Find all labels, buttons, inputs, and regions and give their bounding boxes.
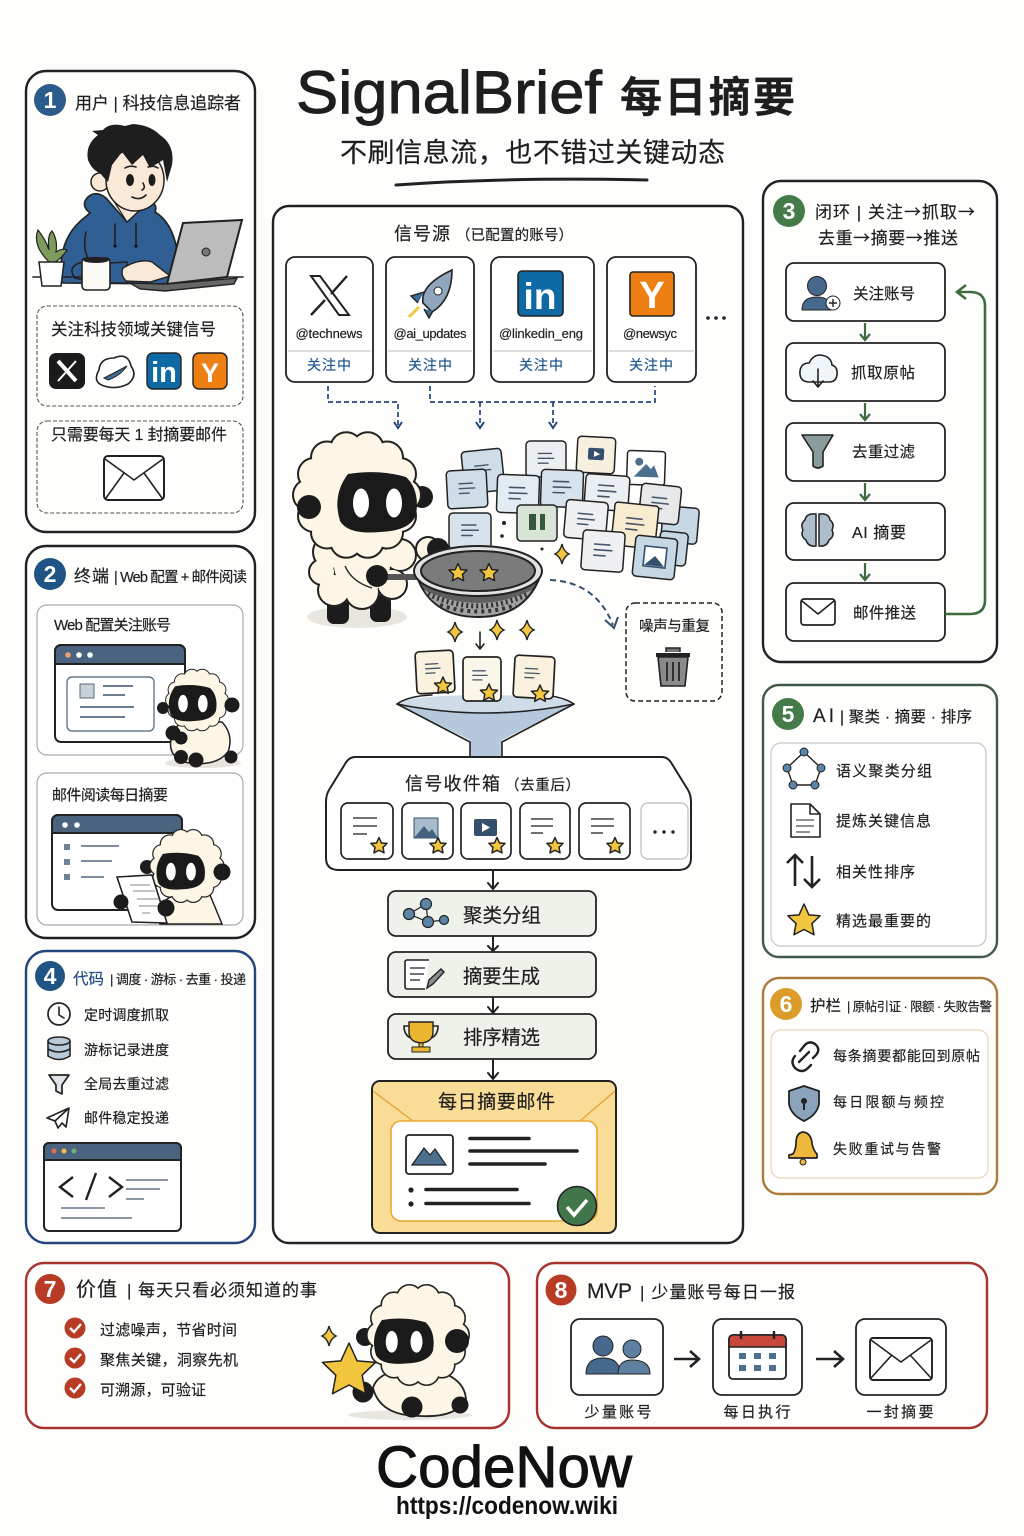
badge 2 <box>34 558 66 590</box>
badge 3: 3 <box>783 198 795 224</box>
step: dedupe: 去重过滤 <box>852 443 915 461</box>
row: extract <box>791 804 931 837</box>
step: follow <box>786 263 945 321</box>
icon: trash <box>656 648 690 686</box>
icon: X logo <box>311 276 349 315</box>
icon: envelope <box>104 456 164 500</box>
row: schedule <box>48 1003 169 1025</box>
value row 2: 聚焦关键，洞察先机 <box>100 1351 238 1369</box>
card: email reading: 邮件阅读每日摘要 <box>52 786 168 804</box>
card: technews <box>286 257 373 382</box>
icon: Y logo: Y <box>639 275 665 317</box>
dashed connectors <box>328 386 655 428</box>
badge 7 <box>35 1274 65 1304</box>
heading 2 <box>74 567 247 586</box>
email card: daily digest: 每日摘要邮件 <box>438 1091 555 1113</box>
footer brand: CodeNow <box>376 1435 633 1500</box>
panel: inbox: 信号收件箱 <box>405 774 500 794</box>
row: delivery: 邮件稳定投递 <box>84 1110 169 1126</box>
heading 3: 闭环 | 关注→抓取→ <box>815 198 975 223</box>
browser window <box>55 645 185 742</box>
panel 6: guardrails <box>763 978 997 1194</box>
heading 5: AI <box>813 706 834 727</box>
heading 7: | 每天只看必须知道的事 <box>127 1281 317 1300</box>
title: 每日摘要 <box>620 74 795 121</box>
panel: inbox <box>326 757 691 870</box>
row: shield: 每日限额与频控 <box>833 1094 944 1110</box>
heading 1: 用户 | 科技信息追踪者 <box>75 94 241 113</box>
more sources <box>706 316 726 320</box>
illustration: user at laptop <box>33 124 243 291</box>
icon: add user <box>802 276 840 310</box>
panel 7: value <box>26 1263 509 1428</box>
step: fetch <box>786 343 945 401</box>
tile: few accounts <box>571 1319 663 1421</box>
panel: inbox: （去重后） <box>505 777 580 794</box>
icon: cloud rocket <box>96 356 134 388</box>
email card: daily digest <box>372 1081 616 1233</box>
row: links <box>792 1042 980 1071</box>
heading 2: 终端 <box>74 567 109 586</box>
badge 1 <box>34 84 66 116</box>
card: ai_updates: 关注中 <box>408 357 452 373</box>
step: follow: 关注账号 <box>853 285 915 303</box>
icon: linkedin logo: in <box>524 276 556 317</box>
heading: sources <box>394 224 573 244</box>
card: web config <box>37 605 243 768</box>
card: ai_updates: @ai_updates <box>394 326 467 341</box>
card: newsyc: 关注中 <box>629 357 673 373</box>
badge 5 <box>772 698 804 730</box>
box: follow signals: 关注科技领域关键信号 <box>51 320 216 339</box>
step: summary generation <box>388 952 596 997</box>
box: follow signals <box>37 306 243 406</box>
panel 4: code <box>26 951 255 1243</box>
step: summarize: AI 摘要 <box>852 524 906 542</box>
icon: trophy <box>404 1022 438 1052</box>
heading 8 <box>587 1280 795 1303</box>
panel 3: closed loop <box>763 181 997 662</box>
illustration: incoming post cards <box>446 436 700 580</box>
heading 2: | Web 配置 + 邮件阅读 <box>114 569 247 586</box>
row: schedule: 定时调度抓取 <box>84 1007 169 1023</box>
panel 5: AI <box>763 685 997 957</box>
box: noise and duplicates <box>626 603 722 701</box>
badge 8 <box>546 1274 576 1306</box>
value row 1: 过滤噪声，节省时间 <box>100 1321 237 1339</box>
badge 7: 7 <box>44 1276 56 1302</box>
box: noise and duplicates: 噪声与重复 <box>639 617 710 635</box>
heading 4: | 调度 · 游标 · 去重 · 投递 <box>110 972 246 987</box>
heading 4: 代码 <box>73 970 104 988</box>
step: clustering <box>388 891 596 936</box>
step: fetch: 抓取原帖 <box>851 364 915 382</box>
icon: Y: Y <box>201 358 219 388</box>
heading 3 <box>815 198 975 249</box>
card: newsyc: @newsyc <box>623 326 678 341</box>
heading 4 <box>73 970 246 988</box>
heading 8: MVP <box>587 1280 632 1303</box>
icon: Y <box>193 353 227 389</box>
loop arrow <box>945 285 985 614</box>
heading: sources: （已配置的账号） <box>456 227 573 244</box>
row: ranking: 相关性排序 <box>836 864 915 881</box>
card: technews: 关注中 <box>307 357 351 373</box>
step: push email <box>786 583 945 641</box>
icon: doc pencil <box>405 960 444 989</box>
heading 6: | 原帖引证 · 限额 · 失败告警 <box>847 999 992 1014</box>
row: extract: 提炼关键信息 <box>836 813 931 830</box>
subtitle: 不刷信息流，也不错过关键动态 <box>340 138 725 168</box>
tile: daily run <box>713 1319 802 1421</box>
row: bell: 失败重试与告警 <box>833 1141 941 1157</box>
arrows between steps <box>488 871 498 1079</box>
card: linkedin_eng <box>491 257 594 382</box>
wok <box>414 546 542 617</box>
value row 3 <box>64 1378 206 1399</box>
panel: center pipeline <box>273 206 743 1243</box>
tile: one digest <box>856 1319 946 1421</box>
sheep <box>157 670 241 768</box>
heading 3: 去重→摘要→推送 <box>818 224 958 249</box>
row: delivery <box>47 1108 169 1128</box>
badge 8: 8 <box>555 1277 568 1303</box>
card: newsyc <box>607 257 696 382</box>
arrow <box>674 1351 699 1367</box>
subtitle <box>340 138 725 185</box>
step: summarize <box>786 503 945 560</box>
step: clustering: 聚类分组 <box>463 905 541 927</box>
row: shield <box>789 1086 944 1121</box>
sheep with letter <box>114 830 230 924</box>
row: clustering: 语义聚类分组 <box>836 763 932 780</box>
heading 6: 护栏 <box>810 997 841 1015</box>
icon: rocket <box>409 270 452 318</box>
heading 8: | 少量账号每日一报 <box>640 1283 795 1302</box>
inbox tile: more <box>641 803 688 859</box>
browser window <box>52 815 182 910</box>
tile: few accounts: 少量账号 <box>584 1404 652 1421</box>
funnel <box>397 695 574 758</box>
icon: X <box>49 353 85 389</box>
green arrows <box>860 323 870 580</box>
icon: linkedin <box>147 353 181 389</box>
icon: nodes <box>404 898 448 928</box>
heading: sources: 信号源 <box>394 224 450 244</box>
badge 2: 2 <box>44 561 56 587</box>
row: dedupe: 全局去重过滤 <box>84 1076 169 1092</box>
row: top picks: 精选最重要的 <box>836 913 931 930</box>
title <box>296 59 795 126</box>
check badge <box>558 1186 596 1226</box>
arrow: to noise <box>550 580 618 628</box>
illustration: sheep with wok <box>294 433 542 628</box>
heading 7 <box>76 1278 317 1301</box>
step: push email: 邮件推送 <box>853 604 916 622</box>
badge 1: 1 <box>44 87 57 113</box>
badge 4 <box>35 961 65 991</box>
panel 1: user <box>26 71 255 532</box>
panel 8: MVP <box>537 1263 987 1428</box>
icon: brain <box>802 514 833 546</box>
row: clustering <box>783 748 932 789</box>
footer brand: https://codenow.wiki <box>396 1492 618 1520</box>
step: summary generation: 摘要生成 <box>463 966 540 988</box>
title: SignalBrief <box>296 59 602 126</box>
tile: one digest: 一封摘要 <box>866 1403 934 1421</box>
row: top picks <box>788 904 931 935</box>
inbox tile: image <box>402 803 453 859</box>
heading 7: 价值 <box>76 1278 117 1301</box>
badge 6: 6 <box>780 991 792 1017</box>
row: dedupe <box>49 1075 169 1094</box>
card: linkedin_eng: 关注中 <box>519 357 563 373</box>
heading 5 <box>813 706 972 727</box>
icon: mail <box>801 599 835 625</box>
panel 2: terminals <box>26 546 255 938</box>
tile: daily run: 每日执行 <box>724 1404 790 1421</box>
arrow <box>816 1351 843 1367</box>
heading 6 <box>810 997 992 1015</box>
inbox tile: text <box>579 803 630 859</box>
inbox tile: video <box>461 803 511 859</box>
icon: cloud <box>800 355 837 387</box>
badge 6 <box>770 988 802 1020</box>
row: links: 每条摘要都能回到原帖 <box>833 1048 980 1064</box>
image thumbnail <box>406 1135 453 1174</box>
value row 2 <box>64 1348 238 1369</box>
card: ai_updates <box>386 257 474 382</box>
icon: funnel <box>802 435 833 468</box>
sheep with star <box>322 1286 472 1420</box>
card: linkedin_eng: @linkedin_eng <box>499 326 583 341</box>
row: cursor: 游标记录进度 <box>84 1042 169 1058</box>
inbox tile: text <box>520 803 570 859</box>
badge 3 <box>773 195 805 227</box>
card: web config: Web 配置关注账号 <box>54 617 171 634</box>
heading 5: | 聚类 · 摘要 · 排序 <box>840 708 972 726</box>
step: ranking <box>388 1014 596 1059</box>
box: one email: 只需要每天 1 封摘要邮件 <box>51 426 227 444</box>
value row 3: 可溯源，可验证 <box>100 1382 206 1399</box>
step: ranking: 排序精选 <box>463 1027 540 1049</box>
row: cursor <box>48 1037 169 1060</box>
inbox tile: text <box>341 803 393 859</box>
value row 1 <box>64 1318 237 1339</box>
box: one email <box>37 421 243 513</box>
selected posts <box>415 650 555 701</box>
row: bell <box>789 1132 941 1165</box>
code window <box>44 1143 181 1231</box>
card: technews: @technews <box>296 326 363 341</box>
badge 5: 5 <box>782 701 795 727</box>
icon: linkedin: in <box>151 357 177 389</box>
card: email reading <box>37 773 243 925</box>
row: ranking <box>787 855 915 887</box>
badge 4: 4 <box>44 963 57 989</box>
sparkles and arrow <box>448 620 534 649</box>
step: dedupe <box>786 423 945 481</box>
